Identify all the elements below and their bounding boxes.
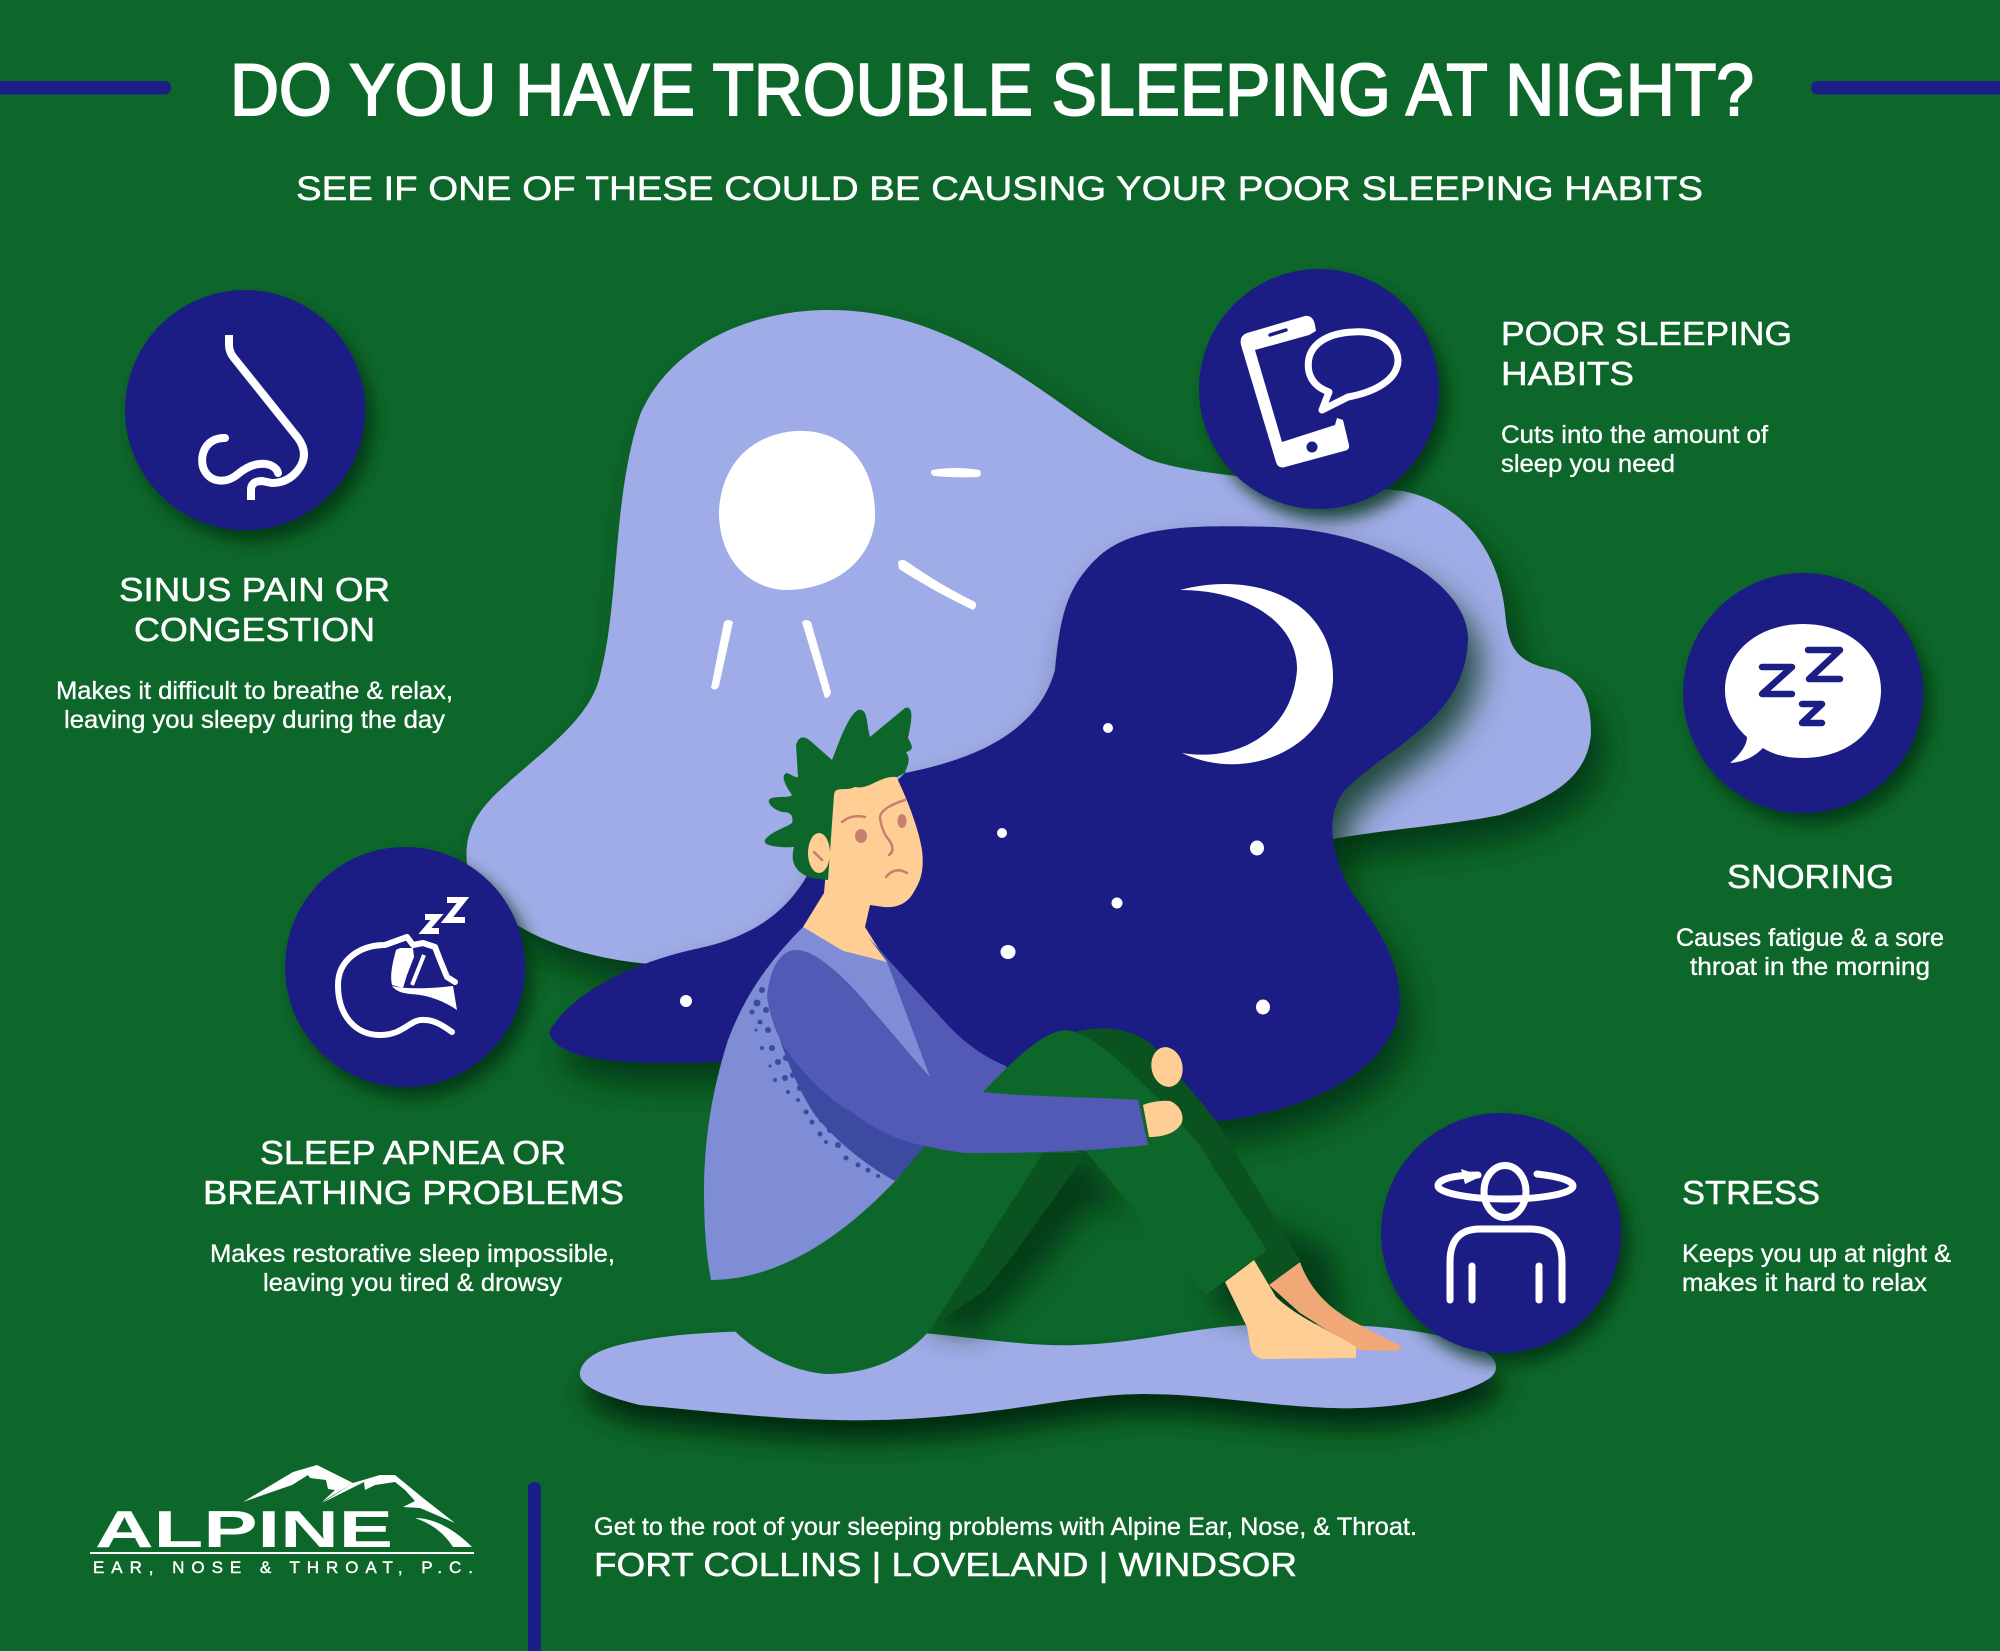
footer divider (528, 1482, 541, 1651)
footer text (594, 1513, 1417, 1583)
dark leg strip (932, 1153, 1087, 1327)
feet (1269, 1262, 1402, 1351)
heading: SINUS PAIN OR (119, 571, 390, 608)
shirt right edge (868, 937, 1020, 1110)
shirt chest (820, 945, 930, 1077)
panel: snoring (1676, 573, 1944, 981)
header accent bar left (0, 81, 171, 94)
panel: sleep apnea (203, 847, 624, 1297)
icon: snoring speech bubble (1683, 573, 1923, 813)
logo rule (90, 1552, 474, 1554)
heading: POOR SLEEPING (1501, 315, 1792, 352)
body text: leaving you tired & drowsy (263, 1269, 563, 1297)
heading: CONGESTION (134, 611, 375, 648)
subtitle: SEE IF ONE OF THESE COULD BE CAUSING YOUR POOR SLEEPING HABITS (296, 170, 1703, 208)
heading: HABITS (1501, 355, 1634, 392)
body text: sleep you need (1501, 450, 1675, 478)
heading: STRESS (1682, 1174, 1820, 1211)
sun (711, 431, 981, 698)
body text: Cuts into the amount of (1501, 421, 1768, 449)
heading: SLEEP APNEA OR (260, 1134, 566, 1171)
body text: Makes it difficult to breathe & relax, (56, 677, 453, 705)
body text: makes it hard to relax (1682, 1269, 1928, 1297)
ground (580, 1324, 1496, 1420)
arm sleeve (767, 950, 1148, 1153)
icon: person with spinning head (1381, 1113, 1621, 1353)
panel: poor sleeping habits (1199, 269, 1792, 509)
body text: throat in the morning (1690, 953, 1930, 981)
icon: sleeping head (285, 847, 525, 1087)
thigh (711, 1125, 1082, 1374)
icon: phone and speech bubble (1199, 269, 1439, 509)
leg shadow (925, 1160, 1345, 1335)
moon (1180, 584, 1333, 764)
heading: BREATHING PROBLEMS (203, 1174, 624, 1211)
neck and face (803, 777, 923, 964)
header accent bar right (1811, 81, 2000, 94)
body text: Keeps you up at night & (1682, 1240, 1951, 1268)
hair (765, 708, 912, 880)
logo wordmark: ALPINE (95, 1501, 393, 1559)
day cloud blob (467, 310, 1591, 1000)
title: DO YOU HAVE TROUBLE SLEEPING AT NIGHT? (230, 50, 1754, 131)
logo tagline: EAR, NOSE & THROAT, P.C. (93, 1558, 473, 1577)
body text: leaving you sleepy during the day (64, 706, 446, 734)
sleeve shadow (772, 1010, 930, 1181)
logo: Alpine Ear, Nose & Throat (90, 1465, 474, 1577)
footer text: FORT COLLINS | LOVELAND | WINDSOR (594, 1546, 1297, 1583)
footer text: Get to the root of your sleeping problems with Alpine Ear, Nose, & Throat. (594, 1513, 1417, 1541)
night sky blob (549, 526, 1468, 1130)
body text: Makes restorative sleep impossible, (210, 1240, 615, 1268)
face details (814, 800, 907, 877)
back leg (932, 1028, 1300, 1327)
heading: SNORING (1727, 858, 1894, 895)
shirt texture speckles (750, 987, 880, 1178)
shirt body (704, 927, 960, 1280)
person sitting (704, 708, 1402, 1374)
hand lower (1143, 1101, 1182, 1137)
stars (680, 723, 1270, 1014)
icon: nose (125, 290, 365, 530)
body text: Causes fatigue & a sore (1676, 924, 1944, 952)
logo mountains (243, 1465, 472, 1547)
panel: sinus pain (56, 290, 453, 734)
shin and knee (983, 1030, 1267, 1295)
ear (808, 833, 830, 873)
hand upper (1148, 1044, 1186, 1090)
panel: stress (1381, 1113, 1951, 1353)
